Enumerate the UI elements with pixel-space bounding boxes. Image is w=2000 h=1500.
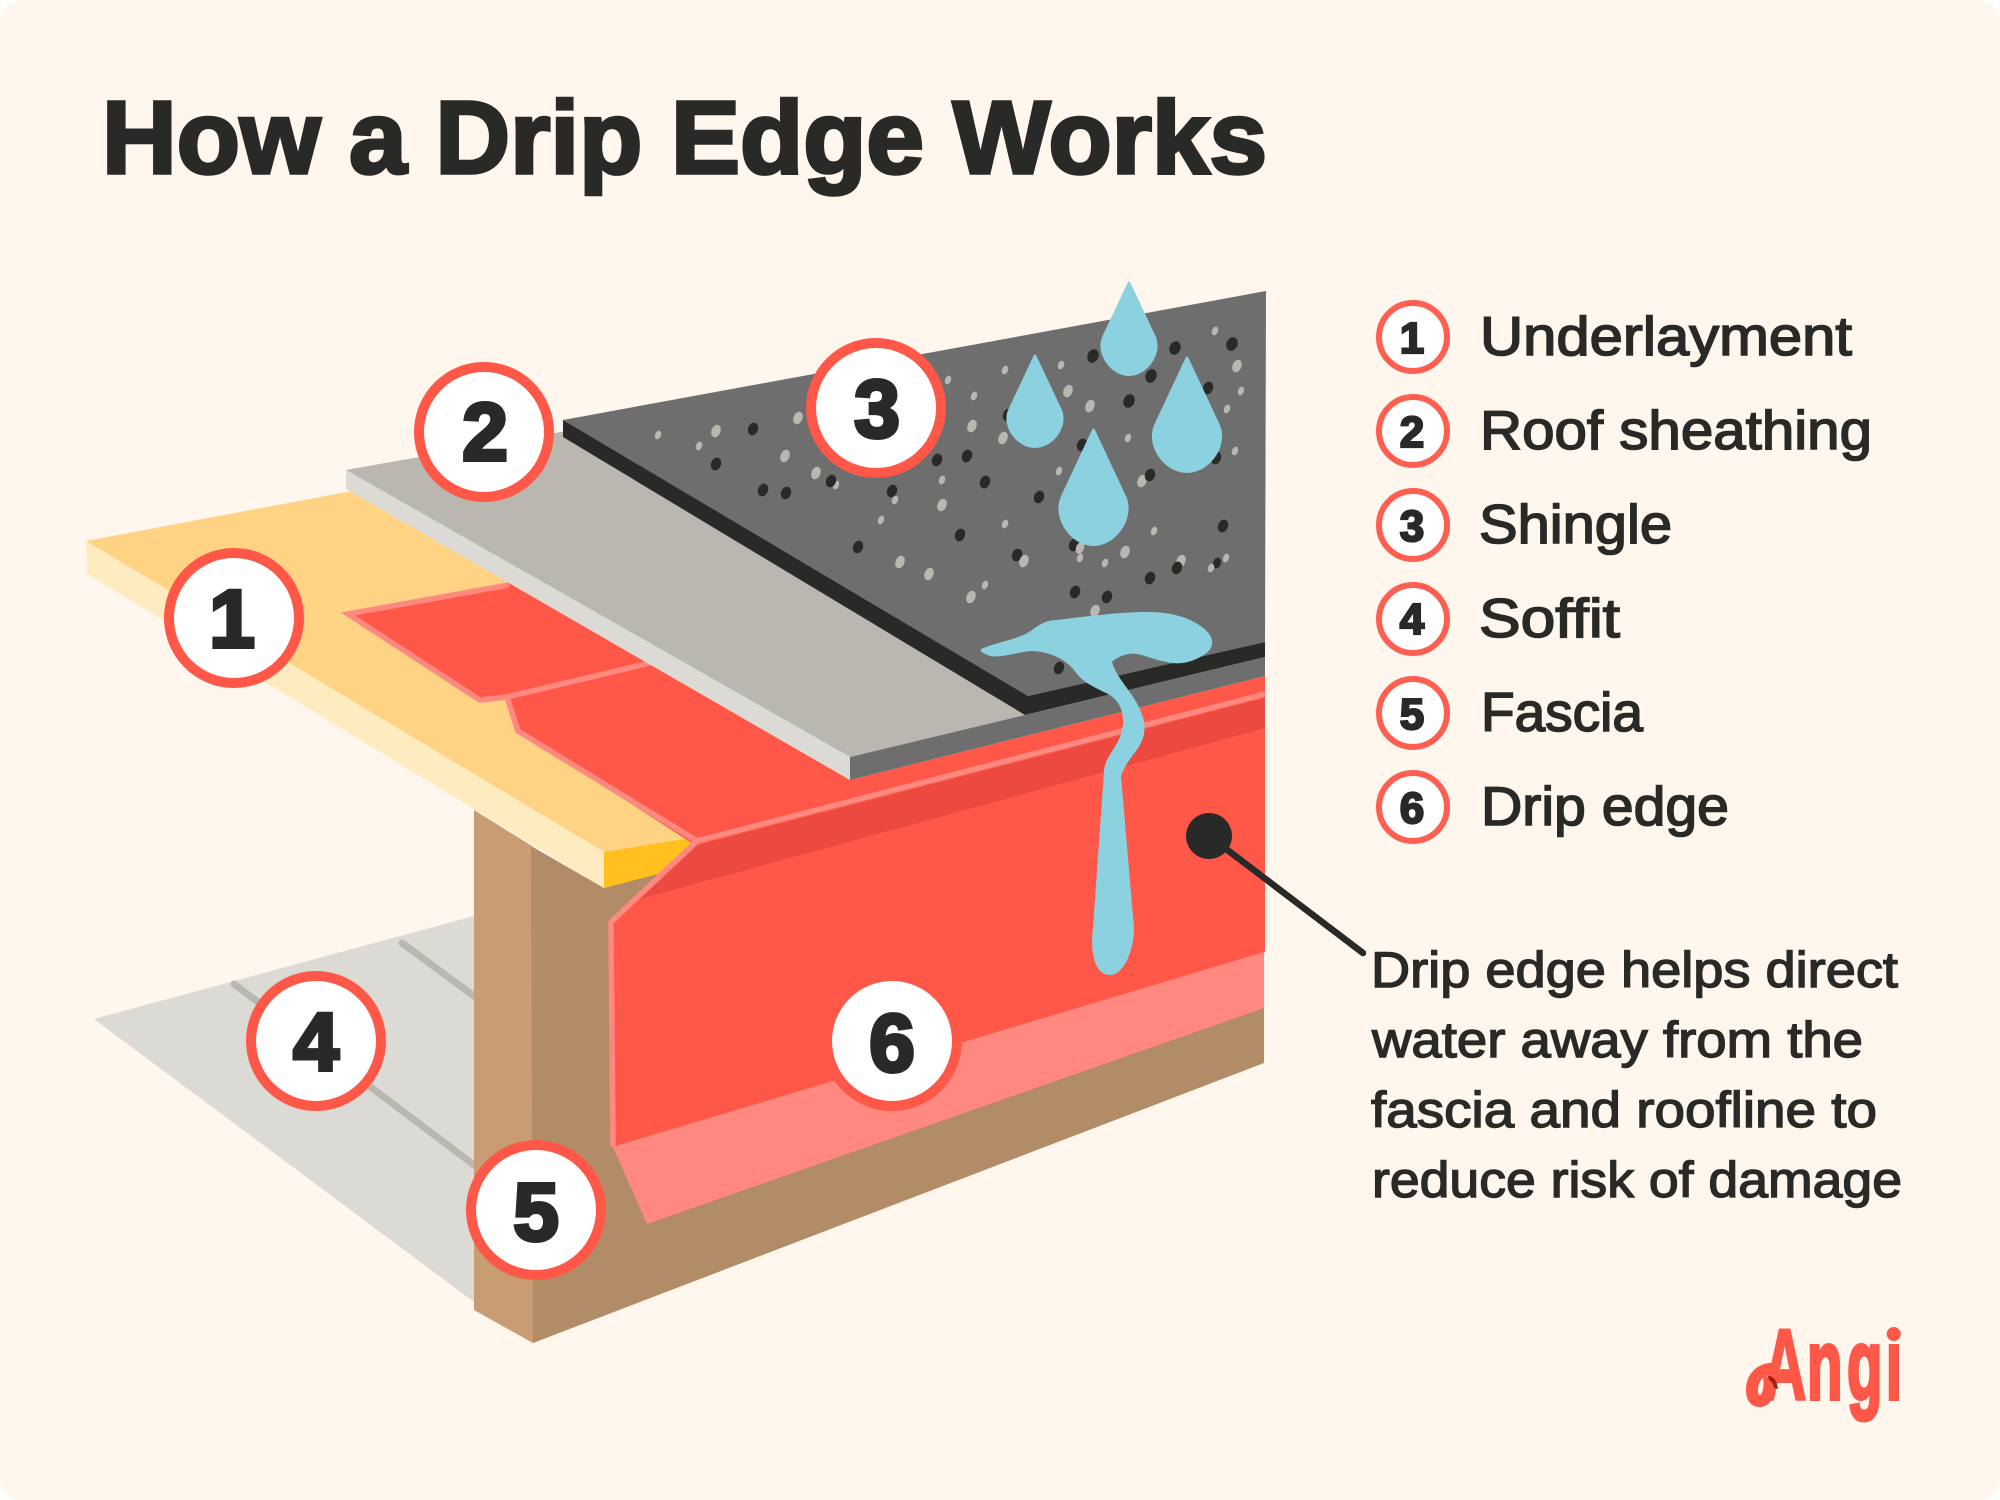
legend item 1: Underlayment [1480, 305, 1852, 367]
callout pointer [1186, 813, 1363, 953]
Angi logo: A [1763, 1309, 1806, 1421]
legend item 2: Roof sheathing [1480, 399, 1872, 461]
legend item 2 [1379, 397, 1872, 465]
fascia board [474, 700, 1264, 1343]
marker 4 [251, 976, 381, 1106]
callout text: water away from the [1371, 1012, 1863, 1068]
legend item 1 [1379, 303, 1852, 371]
legend item 4: Soffit [1479, 587, 1620, 649]
legend item 3: 3 [1400, 502, 1424, 551]
callout text: fascia and roofline to [1371, 1082, 1877, 1138]
marker 4: 4 [293, 997, 339, 1088]
legend [1379, 303, 1872, 841]
legend item 6: Drip edge [1481, 775, 1729, 837]
legend item 4 [1379, 585, 1620, 653]
callout text [1371, 942, 1902, 1208]
marker 1: 1 [209, 574, 255, 665]
Angi logo: ngi [1807, 1310, 1902, 1421]
marker 5: 5 [513, 1167, 559, 1258]
water running over the drip edge [981, 612, 1212, 975]
legend item 2: 2 [1400, 408, 1424, 457]
legend item 5: 5 [1400, 690, 1424, 739]
marker 2 [419, 367, 549, 497]
legend item 5 [1379, 679, 1643, 747]
marker 5 [471, 1145, 601, 1275]
legend item 3 [1379, 491, 1672, 559]
legend item 4: 4 [1400, 595, 1425, 644]
drip edge flashing [348, 583, 1265, 1224]
soffit panel [94, 916, 474, 1302]
callout text: reduce risk of damage [1372, 1152, 1902, 1208]
marker 3: 3 [854, 364, 900, 455]
shingle granules [654, 326, 1245, 676]
roof sheathing [346, 425, 1025, 780]
marker 3 [811, 343, 941, 473]
roof cross-section illustration [86, 282, 1266, 1343]
marker 2: 2 [462, 387, 508, 478]
legend item 1: 1 [1400, 314, 1424, 363]
title: How a Drip Edge Works [102, 80, 1267, 195]
underlayment [86, 482, 860, 888]
legend item 6 [1379, 773, 1729, 841]
callout text: Drip edge helps direct [1371, 942, 1898, 998]
marker 6: 6 [869, 998, 915, 1089]
shingle [563, 291, 1266, 780]
Angi logo [1752, 1309, 1906, 1421]
water drops [1006, 282, 1222, 546]
marker 6 [827, 976, 957, 1106]
legend item 3: Shingle [1479, 493, 1672, 555]
marker 1 [169, 553, 299, 683]
legend item 6: 6 [1400, 784, 1424, 833]
legend item 5: Fascia [1481, 681, 1643, 743]
